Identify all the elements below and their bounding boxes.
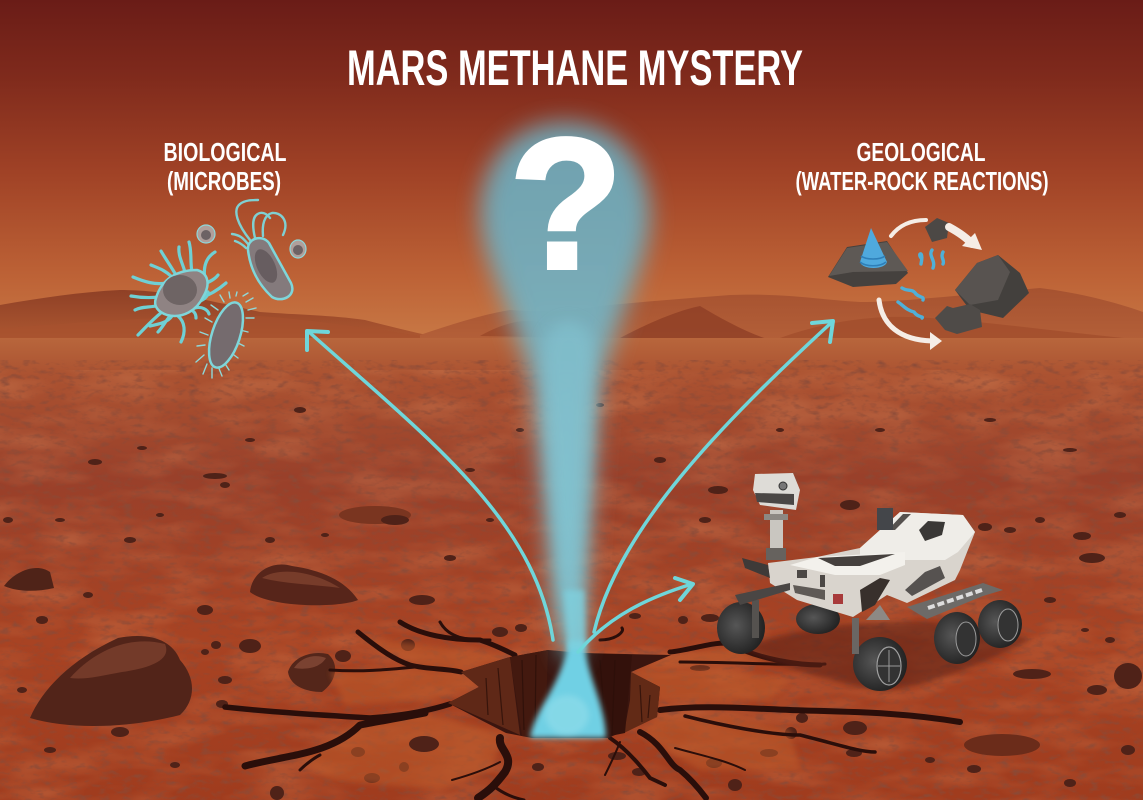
rover shadow <box>740 622 1030 690</box>
fissure cracks <box>225 622 960 800</box>
plume glow head <box>480 122 650 660</box>
arrow: to biological <box>307 331 553 640</box>
label: geological <box>796 137 1048 196</box>
label: geological: (WATER-ROCK REACTIONS) <box>796 166 1048 196</box>
water squiggles <box>898 250 943 318</box>
rover <box>717 473 1030 691</box>
scattered rocks <box>3 403 1142 800</box>
rover mast and head <box>753 473 800 560</box>
rover rear wheels <box>796 600 1022 664</box>
plume base at fissure <box>530 640 606 738</box>
microbe: spiky bacillus <box>196 292 256 378</box>
background: distant dunes <box>0 288 1143 350</box>
arrow: to geological <box>594 321 833 632</box>
rock with water drop <box>828 228 908 287</box>
ground fissure <box>225 622 960 800</box>
label: biological: (MICROBES) <box>167 166 281 196</box>
plume column <box>544 321 593 650</box>
icon: water-rock reactions <box>828 218 1029 350</box>
background: martian sky <box>0 0 1143 345</box>
microbe: flagellated rod <box>232 200 292 299</box>
rock on plate <box>409 736 439 752</box>
arrow: to rover <box>578 578 693 652</box>
microbe: small coccus left <box>197 225 215 243</box>
small flying rock <box>925 218 949 242</box>
crack opening <box>448 650 671 738</box>
large boulders <box>4 564 358 726</box>
title: MARS METHANE MYSTERY <box>347 40 803 96</box>
icon: microbes <box>131 200 306 378</box>
label: geological: GEOLOGICAL <box>856 137 986 167</box>
microbe: tentacled cell <box>131 242 226 342</box>
microbe: small coccus right <box>290 240 306 258</box>
rover body <box>742 508 975 617</box>
white reaction arrows <box>879 220 972 341</box>
lit ground plates <box>300 640 800 790</box>
background: martian ground <box>0 338 1143 800</box>
rock cluster <box>935 255 1029 334</box>
label: biological <box>164 137 287 196</box>
question mark: ? <box>509 101 623 308</box>
rover front wheels <box>717 583 907 691</box>
methane plume <box>480 122 650 738</box>
rover rocker arm <box>907 583 1003 619</box>
crack walls <box>448 657 520 735</box>
label: biological: BIOLOGICAL <box>164 137 287 167</box>
